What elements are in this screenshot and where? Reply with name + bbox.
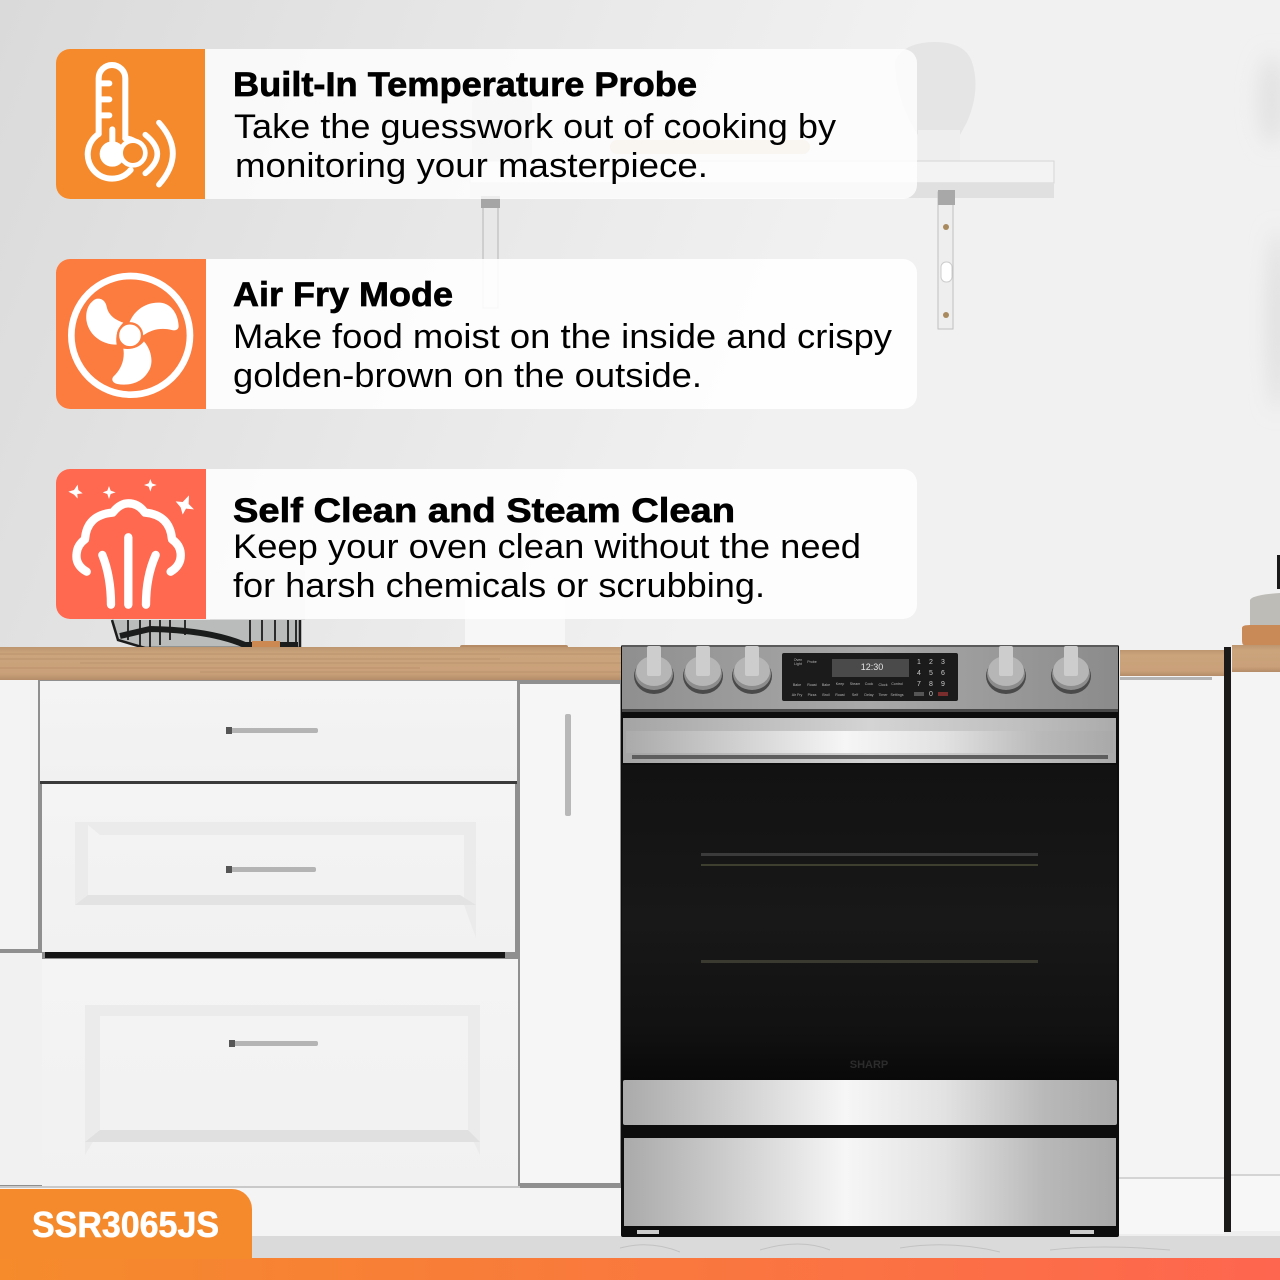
oven display and keypad: Roast <box>835 693 845 697</box>
oven display and keypad: 7 <box>917 681 921 688</box>
description <box>233 528 861 605</box>
feature card: self clean and steam clean <box>56 469 917 619</box>
oven display and keypad: 1 <box>917 659 921 666</box>
icon: steam and sparkles <box>56 469 206 619</box>
oven display and keypad: 0 <box>929 691 933 698</box>
oven display and keypad: Keep <box>836 682 844 686</box>
feature card: temperature probe <box>56 49 917 199</box>
oven display and keypad: Delay <box>864 693 874 697</box>
oven display and keypad: Oven <box>794 658 802 662</box>
bottom gradient bar <box>0 1258 1280 1280</box>
oven storage drawer <box>624 1138 1116 1226</box>
description: for harsh chemicals or scrubbing. <box>233 567 765 605</box>
oven display and keypad: Probe <box>807 660 817 664</box>
oven control panel <box>622 645 1118 712</box>
oven display and keypad: Pizza <box>808 693 816 697</box>
lower cabinets <box>0 647 1280 1260</box>
oven display and keypad <box>782 653 958 701</box>
oven display and keypad: Settings <box>890 693 904 697</box>
oven display and keypad: Cook <box>865 682 873 686</box>
oven display and keypad: 6 <box>941 670 945 677</box>
feature card: air fry <box>56 259 917 409</box>
description: Take the guesswork out of cooking by <box>234 108 836 146</box>
dish rack and counter objects <box>112 555 1280 651</box>
wall shelf with vase <box>470 42 1280 410</box>
oven knobs <box>634 646 1091 694</box>
model badge <box>0 1189 252 1259</box>
oven display and keypad: 8 <box>929 681 933 688</box>
oven display and keypad: 12:30 <box>861 662 883 672</box>
oven display and keypad: Bake <box>793 683 801 687</box>
model badge: SSR3065JS <box>32 1204 219 1245</box>
oven lower steel band <box>623 1080 1117 1125</box>
wood countertop <box>0 645 1280 680</box>
oven display and keypad: Roast <box>807 683 817 687</box>
heading: Air Fry Mode: Air Fry Mode <box>233 276 453 314</box>
description <box>234 108 836 185</box>
description <box>233 318 892 395</box>
oven: stainless range <box>621 645 1119 1237</box>
oven display and keypad: Self <box>852 693 858 697</box>
oven display and keypad: Control <box>891 682 903 686</box>
oven display and keypad: 3 <box>941 659 945 666</box>
oven display and keypad: Clock <box>878 683 888 687</box>
oven display and keypad: Steam <box>850 682 860 686</box>
cabinet handles <box>226 709 1172 1047</box>
background: kitchen wall <box>0 0 1280 660</box>
oven door glass with racks <box>622 765 1117 1080</box>
icon: fan <box>56 259 206 409</box>
oven display and keypad: 9 <box>941 681 945 688</box>
oven display and keypad: Bake <box>822 683 830 687</box>
oven display and keypad: Air Fry <box>792 693 802 697</box>
oven display and keypad: Timer <box>878 693 888 697</box>
description: golden-brown on the outside. <box>233 357 702 395</box>
oven display and keypad: Light <box>794 662 802 666</box>
heading: Built-In Temperature Probe: Built-In Temperature Probe <box>233 66 697 104</box>
oven handle <box>623 718 1116 763</box>
description: Make food moist on the inside and crispy <box>233 318 892 356</box>
oven display and keypad: 5 <box>929 670 933 677</box>
oven display and keypad: 4 <box>917 670 921 677</box>
oven door glass with racks: SHARP <box>850 1059 888 1071</box>
heading: Self Clean and Steam Clean: Self Clean and Steam Clean <box>233 492 735 530</box>
oven display and keypad: 2 <box>929 659 933 666</box>
oven display and keypad: Broil <box>822 693 830 697</box>
description: monitoring your masterpiece. <box>235 147 708 185</box>
icon: thermometer probe <box>56 49 205 199</box>
description: Keep your oven clean without the need <box>233 528 861 566</box>
